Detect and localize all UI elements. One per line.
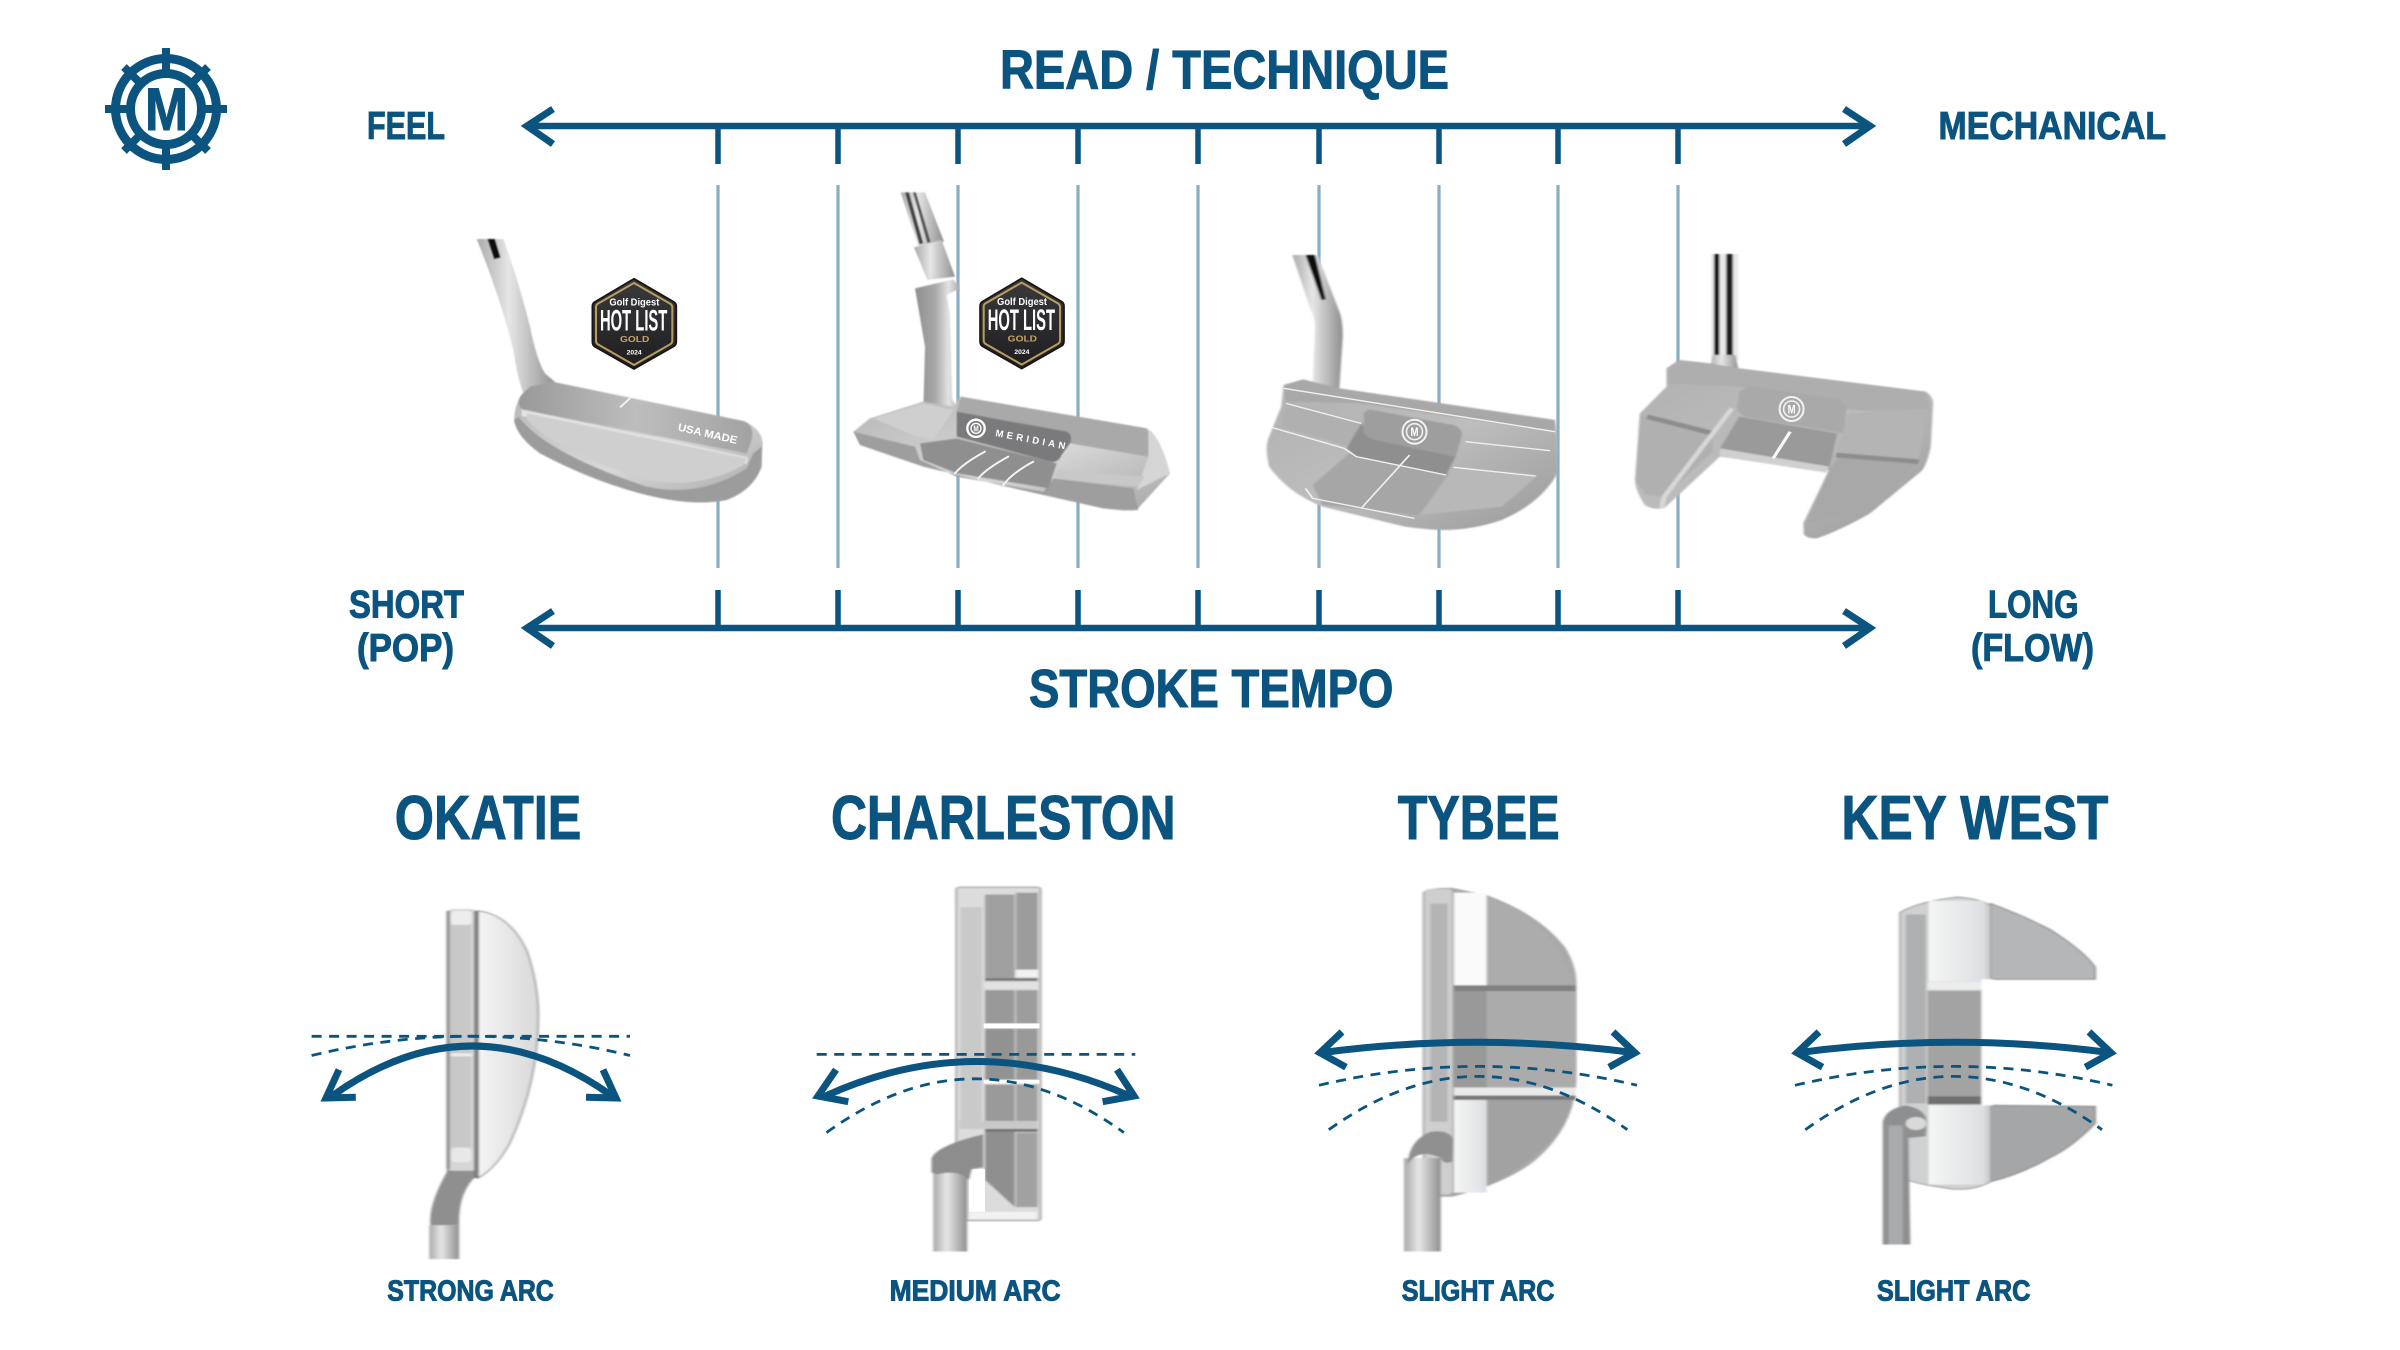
badge: Golf Digest Hot List Gold 2024 second: HOT LIST (988, 304, 1055, 337)
putter: Charleston head (853, 192, 1170, 511)
label: feel: FEEL (367, 105, 445, 148)
heading: Key West: KEY WEST (1841, 784, 2109, 853)
badge: Golf Digest Hot List Gold 2024 second: 2024 (1014, 349, 1030, 356)
arrow: stroke tempo axis with ticks (527, 590, 1870, 646)
putter: Key West head: M (1788, 402, 1796, 416)
label: short (pop) (349, 584, 464, 670)
putter: Tybee head (1267, 255, 1557, 530)
putter: Tybee head: M (1410, 425, 1418, 439)
caption: strong arc: STRONG ARC (387, 1276, 554, 1308)
arrow: read technique axis with ticks (527, 109, 1870, 164)
putter: Charleston head: MERIDIAN (994, 428, 1066, 452)
heading: Okatie: OKATIE (395, 784, 581, 853)
heading: Charleston: CHARLESTON (831, 784, 1176, 853)
badge: Golf Digest Hot List Gold 2024: 2024 (627, 349, 642, 356)
putter top view: Charleston (932, 887, 1041, 1251)
putter: Okatie head: USA MADE (677, 422, 738, 447)
badge: Golf Digest Hot List Gold 2024 (592, 279, 676, 369)
logo: Meridian compass wheel (105, 48, 227, 170)
label: long (flow): LONG (1988, 584, 2078, 626)
label: short (pop): SHORT (349, 584, 464, 626)
label: long (flow) (1971, 584, 2094, 670)
caption: medium arc: MEDIUM ARC (890, 1276, 1061, 1308)
arc diagram: Tybee slight arc (1319, 1032, 1637, 1130)
badge: Golf Digest Hot List Gold 2024: HOT LIST (600, 304, 667, 337)
putter: Okatie head (477, 239, 763, 502)
putter top view: Tybee (1404, 888, 1576, 1251)
putter top view: Key West (1883, 897, 2095, 1245)
caption: slight arc Tybee: SLIGHT ARC (1402, 1276, 1554, 1308)
badge: Golf Digest Hot List Gold 2024 second (980, 278, 1064, 369)
label: mechanical: MECHANICAL (1938, 105, 2166, 148)
logo: Meridian compass wheel: M (145, 76, 188, 143)
arc diagram: Charleston medium arc (817, 1054, 1135, 1133)
label: long (flow): (FLOW) (1971, 627, 2094, 670)
badge: Golf Digest Hot List Gold 2024 second: GOLD (1008, 335, 1037, 344)
heading: Tybee: TYBEE (1398, 784, 1560, 853)
label: short (pop): (POP) (357, 627, 454, 670)
badge: Golf Digest Hot List Gold 2024: Golf Digest (609, 297, 660, 308)
title: stroke tempo: STROKE TEMPO (1029, 659, 1394, 719)
putter: Key West head (1635, 254, 1933, 538)
arc diagram: Key West slight arc (1795, 1032, 2112, 1130)
putter top view: Okatie (429, 909, 538, 1259)
putter: Charleston head: M (973, 425, 979, 434)
badge: Golf Digest Hot List Gold 2024: GOLD (620, 335, 650, 344)
title: read / technique: READ / TECHNIQUE (1000, 38, 1449, 100)
arc diagram: Okatie strong arc (312, 1036, 630, 1098)
badge: Golf Digest Hot List Gold 2024 second: Golf Digest (997, 297, 1048, 308)
caption: slight arc Key West: SLIGHT ARC (1877, 1276, 2030, 1308)
